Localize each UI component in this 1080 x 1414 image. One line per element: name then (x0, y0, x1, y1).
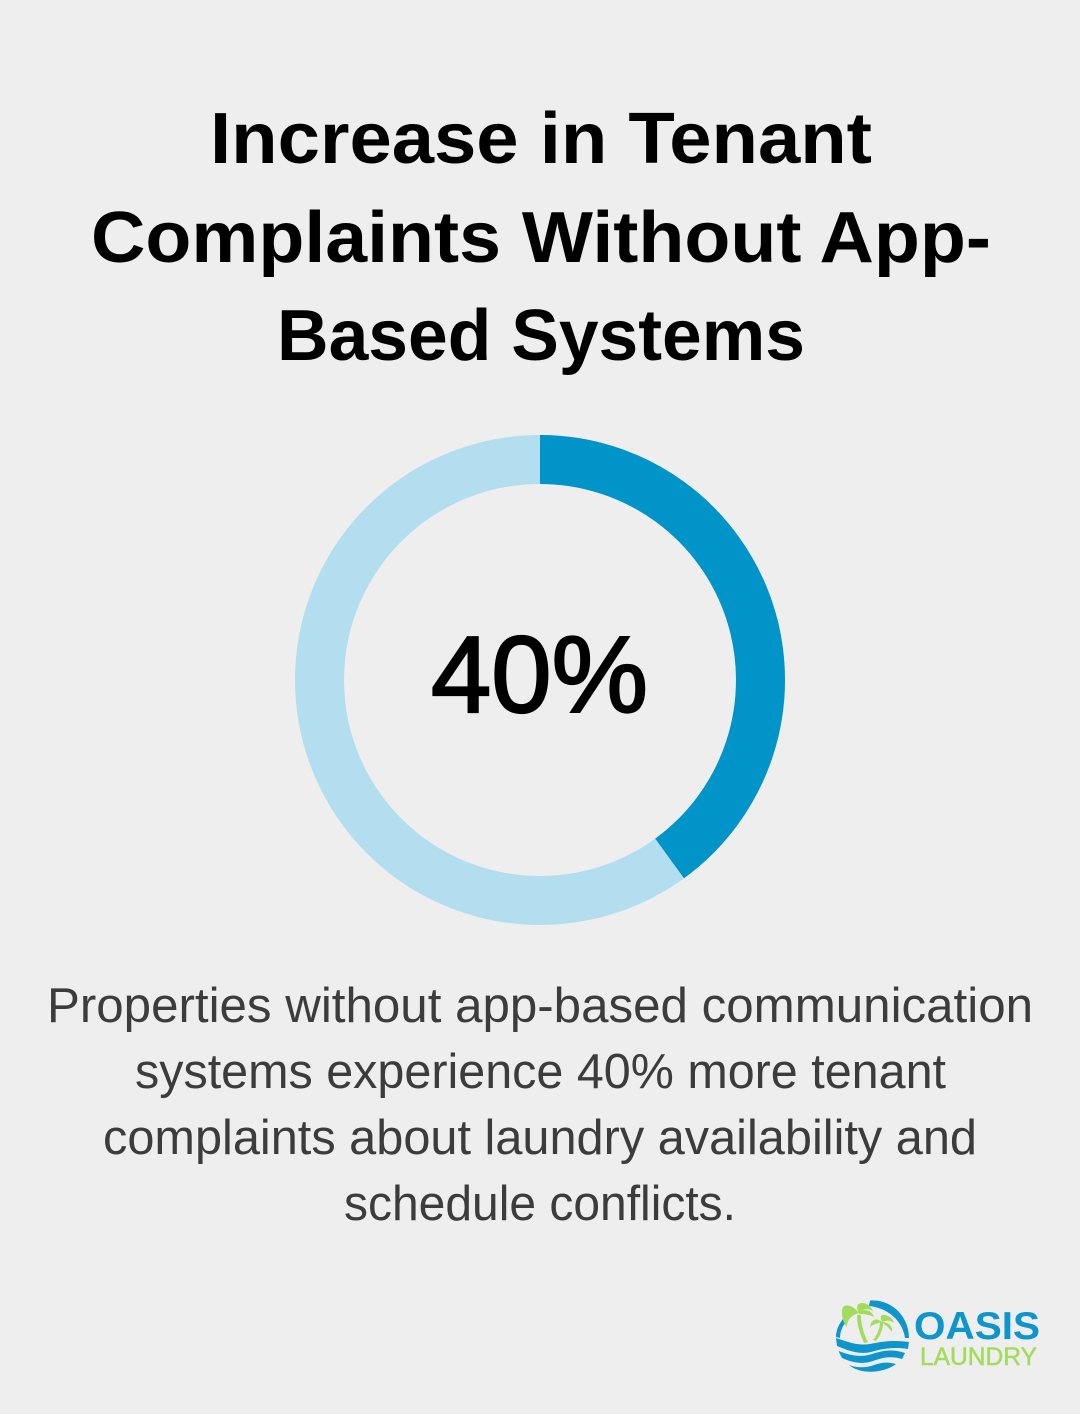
description text: Properties without app-based communication (47, 979, 1033, 1033)
logo: Oasis Laundry (836, 1300, 1040, 1372)
title: Based Systems (277, 296, 805, 376)
description text: schedule conflicts. (344, 1177, 736, 1231)
wordmark: OASIS: OASIS (914, 1305, 1040, 1348)
title: Complaints Without App- (91, 198, 991, 278)
title: Increase in Tenant (210, 99, 872, 179)
icon: palm trees (842, 1303, 894, 1343)
description text (47, 979, 1033, 1231)
icon: sun ring and waves (836, 1300, 909, 1372)
description text: systems experience 40% more tenant (135, 1045, 946, 1099)
description text: complaints about laundry availability and (103, 1111, 977, 1165)
title (91, 99, 991, 376)
wordmark: LAUNDRY: LAUNDRY (920, 1343, 1037, 1371)
donut chart: 40% (320, 460, 761, 900)
donut value: 40% (431, 614, 648, 736)
